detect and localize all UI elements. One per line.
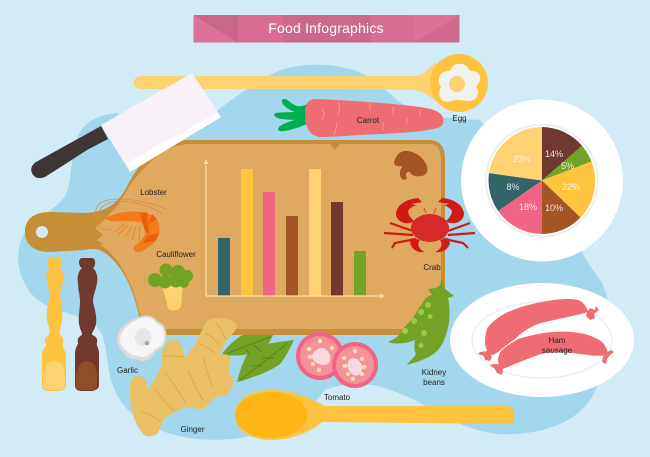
- label: tomato: Tomato: [324, 393, 351, 402]
- cauliflower: [148, 250, 196, 310]
- pie chart: 8%: [506, 182, 520, 192]
- crab: [384, 198, 475, 272]
- ham sausages: [478, 299, 614, 375]
- label: lobster: Lobster: [140, 188, 167, 197]
- label: egg: Egg: [452, 114, 467, 123]
- pie chart: 18%: [519, 202, 537, 212]
- lobster: [95, 188, 167, 252]
- icon: egg yolk: [449, 76, 465, 92]
- label: carrot: Carrot: [357, 116, 380, 125]
- icon: carrot leaves: [274, 99, 307, 131]
- yellow pepper grinder: [42, 258, 66, 391]
- knife: [31, 73, 221, 178]
- label: ham sausage: Ham: [549, 336, 566, 345]
- top spoon with egg: [134, 54, 488, 112]
- pie chart: 5%: [561, 161, 574, 171]
- label: kidney beans: Kidney: [422, 368, 446, 377]
- title banner: [194, 15, 460, 42]
- pie plate: [461, 100, 623, 262]
- pie chart: 14%: [545, 149, 563, 159]
- label: garlic: Garlic: [117, 366, 138, 375]
- pie chart: 22%: [562, 182, 580, 192]
- background blob: [18, 65, 610, 440]
- tomato slices: [296, 332, 378, 402]
- garlic: [117, 315, 166, 375]
- cutting board: [25, 140, 445, 335]
- leaves: [222, 335, 294, 382]
- bottom spoon: [235, 390, 514, 440]
- kidney beans: [388, 277, 454, 387]
- icon: mushroom: [394, 151, 427, 180]
- bar chart: [204, 159, 385, 298]
- title: Food Infographics: [268, 20, 384, 36]
- brown pepper grinder: [75, 258, 99, 391]
- icon: egg: [439, 64, 480, 102]
- pie chart: 23%: [513, 154, 531, 164]
- label: kidney beans: [422, 368, 446, 387]
- pie chart: 10%: [545, 203, 563, 213]
- label: kidney beans: beans: [423, 378, 445, 387]
- label: ginger: Ginger: [180, 425, 205, 434]
- ginger: [130, 318, 237, 436]
- label: ham sausage: [542, 336, 573, 355]
- carrot: [274, 99, 444, 137]
- label: ham sausage: sausage: [542, 346, 573, 355]
- label: cauliflower: Cauliflower: [156, 250, 196, 259]
- pie chart: [489, 127, 595, 234]
- label: crab: Crab: [423, 263, 441, 272]
- ham sausage plate: [450, 283, 634, 397]
